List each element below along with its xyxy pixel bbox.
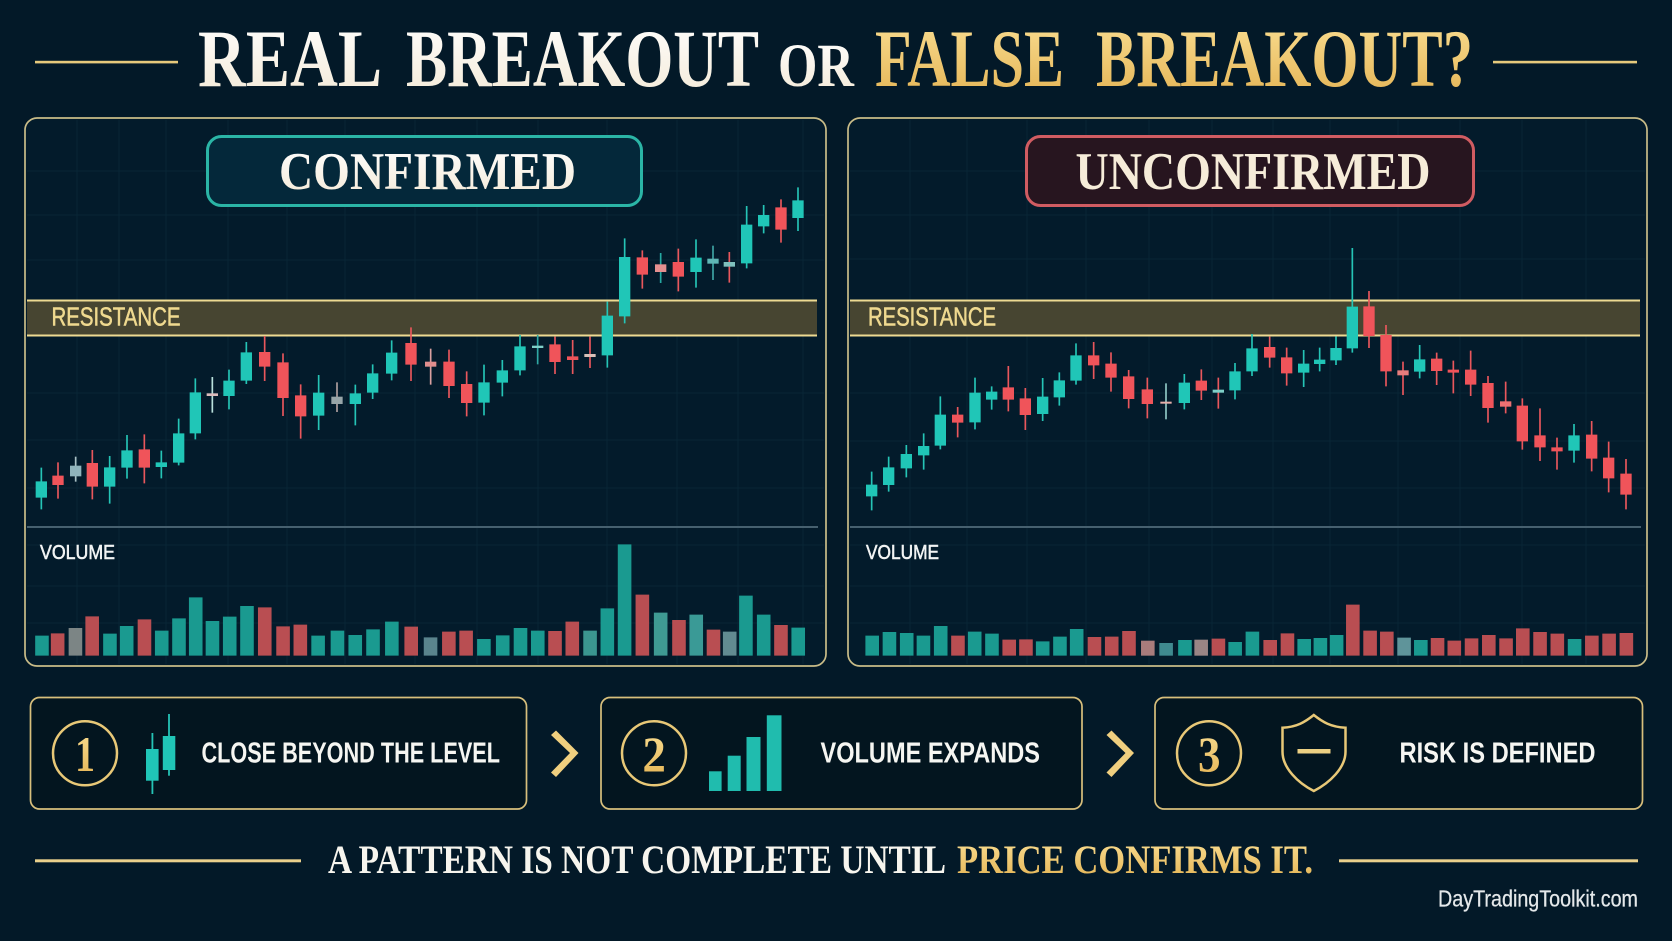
candlestick chart: unconfirmed bbox=[872, 248, 1626, 510]
title: FALSE bbox=[875, 13, 1064, 104]
icon: rising bars bbox=[709, 715, 782, 791]
badge: confirmed: CONFIRMED bbox=[279, 143, 576, 201]
number badge 2 bbox=[622, 721, 686, 785]
arrow 2 bbox=[1106, 730, 1134, 777]
volume divider bbox=[850, 526, 1641, 528]
volume bars: unconfirmed bbox=[872, 605, 1626, 656]
volume divider bbox=[27, 526, 818, 528]
number badge 3: 3 bbox=[1198, 726, 1220, 782]
panel: unconfirmed bbox=[848, 118, 1647, 666]
resistance band bbox=[27, 300, 817, 336]
volume label: VOLUME bbox=[40, 541, 115, 564]
step label: VOLUME EXPANDS bbox=[820, 738, 1040, 770]
step 1: close beyond the level bbox=[30, 698, 526, 809]
resistance band: RESISTANCE bbox=[52, 304, 180, 332]
tagline: A PATTERN IS NOT COMPLETE UNTIL bbox=[328, 837, 946, 882]
icon: candlesticks bbox=[146, 714, 175, 794]
badge: confirmed bbox=[208, 136, 642, 206]
title bbox=[35, 13, 1637, 104]
candlestick chart: confirmed bbox=[41, 187, 798, 509]
step label: RISK IS DEFINED bbox=[1400, 738, 1596, 770]
icon: shield bbox=[1282, 715, 1346, 791]
badge: unconfirmed: UNCONFIRMED bbox=[1076, 143, 1430, 201]
website credit: DayTradingToolkit.com bbox=[1438, 886, 1638, 912]
step label: CLOSE BEYOND THE LEVEL bbox=[202, 738, 500, 770]
number badge 3 bbox=[1177, 721, 1241, 785]
title: BREAKOUT? bbox=[1096, 13, 1473, 104]
title: BREAKOUT bbox=[406, 13, 759, 104]
panel: confirmed bbox=[25, 118, 826, 666]
title: OR bbox=[778, 33, 855, 100]
resistance band: RESISTANCE bbox=[868, 304, 996, 332]
tagline: PRICE CONFIRMS IT. bbox=[957, 837, 1313, 882]
arrow 1 bbox=[551, 730, 578, 777]
number badge 1 bbox=[53, 721, 117, 785]
volume label: VOLUME bbox=[866, 541, 939, 564]
number badge 2: 2 bbox=[642, 726, 666, 782]
step 3: risk is defined bbox=[1155, 698, 1642, 809]
number badge 1: 1 bbox=[75, 726, 95, 782]
volume bars: confirmed bbox=[42, 544, 798, 656]
title: REAL bbox=[198, 13, 382, 104]
tagline bbox=[35, 837, 1638, 882]
step 2: volume expands bbox=[601, 698, 1082, 809]
resistance band bbox=[850, 300, 1640, 336]
